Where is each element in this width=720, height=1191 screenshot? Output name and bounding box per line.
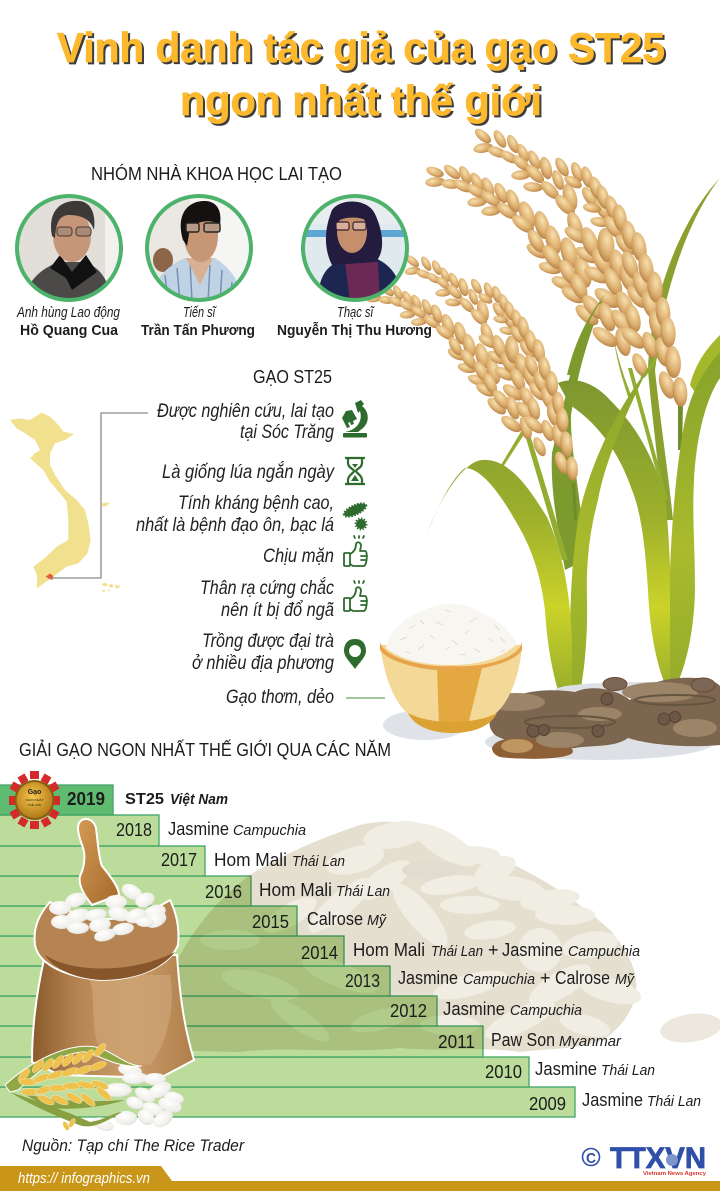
feature: disease resistance	[136, 493, 334, 536]
portrait: Nguyễn Thị Thu Hương	[303, 196, 413, 302]
leaf: upper right back	[648, 178, 720, 520]
caption: Trần Tấn Phương	[141, 304, 255, 339]
row 2013: Jasmine	[398, 968, 458, 988]
rice mound	[386, 604, 517, 665]
row 2017	[161, 850, 345, 870]
medal: Gạo	[28, 789, 41, 796]
feature: sturdy stem: nên ít bị đổ ngã	[221, 600, 334, 621]
feature: short growth: Là giống lúa ngắn ngày	[162, 462, 335, 483]
row 2009: Thái Lan	[647, 1093, 701, 1110]
feature: research: Được nghiên cứu, lai tạo	[157, 401, 334, 422]
map: Vietnam	[10, 413, 120, 592]
row 2016: Thái Lan	[336, 883, 390, 900]
medal	[9, 771, 60, 829]
bar chart: yearly award steps	[0, 785, 575, 1117]
row 2012	[390, 999, 582, 1021]
row 2014: Thái Lan	[431, 943, 483, 960]
row 2013: 2013	[345, 971, 380, 991]
feature: fragrant: Gạo thơm, dẻo	[226, 687, 334, 708]
row 2009	[529, 1090, 701, 1114]
row 2012: Jasmine	[443, 999, 505, 1019]
soil shadow	[485, 724, 715, 760]
row 2014	[301, 940, 640, 963]
icon: hourglass	[345, 458, 365, 484]
row 2016: Hom Mali	[259, 880, 332, 900]
rice in sack	[49, 880, 169, 944]
row 2012: Campuchia	[510, 1002, 582, 1019]
row 2010: Jasmine	[535, 1059, 597, 1079]
feature: research: tại Sóc Trăng	[240, 422, 334, 443]
title	[57, 24, 665, 124]
row 2014: Campuchia	[568, 943, 640, 960]
row 2017: 2017	[161, 850, 197, 870]
feature: disease resistance: nhất là bệnh đạo ôn, bạc lá	[136, 515, 334, 536]
logo: TTXVN: C	[586, 1150, 596, 1167]
portrait: Trần Tấn Phương	[145, 195, 251, 305]
row 2015: Calrose	[307, 909, 363, 929]
row 2010: 2010	[485, 1062, 522, 1082]
panicle: upper plant	[425, 126, 689, 408]
caption: Hồ Quang Cua	[16, 304, 121, 339]
row 2011: Myanmar	[559, 1033, 622, 1050]
row 2015	[252, 909, 387, 932]
row 2017: Hom Mali	[214, 850, 287, 870]
feature: disease resistance: Tính kháng bệnh cao,	[178, 493, 334, 514]
row 2014: Hom Mali	[353, 940, 425, 960]
row 2018: Campuchia	[233, 822, 306, 839]
pointer line to bowl	[346, 697, 385, 699]
footer bar: https:// infographics.vn	[18, 1170, 150, 1187]
row 2013: Calrose	[555, 968, 610, 988]
stem below panicles	[572, 405, 683, 520]
heading: ST25: GẠO ST25	[253, 367, 332, 387]
connector line from map to text	[50, 413, 148, 578]
icon: thumbs up	[344, 581, 367, 611]
feature: sturdy stem	[200, 578, 334, 621]
row 2019: ST25	[125, 791, 164, 808]
icon: bacteria	[342, 501, 368, 529]
heading: awards: GIẢI GẠO NGON NHẤT THẾ GIỚI QUA CÁC NĂM	[19, 739, 391, 760]
feature: widely grown: Trồng được đại trà	[202, 631, 334, 652]
bowl	[380, 645, 522, 727]
golden grains	[16, 1042, 113, 1132]
row 2013: +	[540, 968, 551, 988]
panicle: lower plant	[365, 253, 579, 481]
row 2019: Việt Nam	[170, 791, 228, 808]
leaf: upright left	[570, 370, 647, 724]
medal: THẾ GIỚI	[28, 802, 41, 807]
illustration: rice plants	[365, 126, 720, 724]
row 2018: 2018	[116, 820, 152, 840]
icon: microscope	[342, 400, 368, 438]
scoop	[78, 819, 119, 905]
icon: location pin	[344, 639, 366, 669]
feature: sturdy stem: Thân rạ cứng chắc	[200, 578, 334, 599]
portrait: Hồ Quang Cua	[17, 195, 125, 305]
row 2012: 2012	[390, 1001, 427, 1021]
feature: research	[157, 401, 334, 443]
row 2010	[485, 1059, 655, 1082]
caption: Nguyễn Thị Thu Hương	[277, 304, 432, 339]
row 2016: 2016	[205, 882, 242, 902]
rice ear stalks	[5, 1046, 142, 1092]
row 2009: Jasmine	[582, 1090, 643, 1110]
illustration: soil and bowl of rice	[380, 604, 720, 760]
row 2011: 2011	[438, 1032, 475, 1052]
footer bar	[0, 1166, 720, 1191]
leaf: tall right	[670, 352, 720, 697]
soil mounds	[490, 678, 720, 748]
sack rim	[35, 900, 178, 980]
feature: salt tolerance: Chịu mặn	[263, 546, 334, 567]
row 2013: Mỹ	[615, 971, 635, 988]
row 2019	[67, 789, 228, 809]
caption: Hồ Quang Cua: Anh hùng Lao động	[16, 304, 121, 321]
leaf: big arching right	[558, 380, 672, 697]
white grains	[91, 1062, 185, 1133]
row 2014: 2014	[301, 943, 338, 963]
caption: Nguyễn Thị Thu Hương: Thạc sĩ	[337, 304, 375, 321]
row 2016	[205, 880, 390, 902]
row 2015: 2015	[252, 912, 289, 932]
feature list	[136, 400, 385, 708]
row 2018	[116, 819, 306, 840]
row 2017: Thái Lan	[292, 853, 345, 870]
caption: Nguyễn Thị Thu Hương: Nguyễn Thị Thu Hương	[277, 322, 432, 339]
leaf: tip over grains	[567, 292, 607, 375]
caption: Hồ Quang Cua: Hồ Quang Cua	[20, 322, 119, 339]
heading: team: NHÓM NHÀ KHOA HỌC LAI TẠO	[91, 163, 342, 184]
caption: Trần Tấn Phương: Tiến sĩ	[183, 304, 217, 321]
leaf: narrow left back	[552, 292, 607, 570]
sack body	[32, 955, 194, 1078]
logo: TTXVN: Vietnam News Agency	[643, 1171, 707, 1177]
caption: Trần Tấn Phương: Trần Tấn Phương	[141, 322, 255, 339]
row 2009: 2009	[529, 1094, 566, 1114]
medal: NGON NHẤT	[26, 797, 44, 802]
row 2013	[345, 968, 635, 991]
source: Nguồn: Tạp chí The Rice Trader	[22, 1136, 245, 1155]
illustration: rice sack with scoop	[5, 819, 194, 1133]
row 2014: Jasmine	[502, 940, 563, 960]
icon: thumbs up	[344, 536, 367, 566]
row 2014: +	[488, 940, 499, 960]
leaf: arching left	[427, 460, 572, 724]
award rows	[67, 789, 701, 1114]
feature: widely grown	[192, 631, 334, 674]
row 2010: Thái Lan	[601, 1062, 655, 1079]
background: rice grain pile	[150, 816, 720, 1052]
row 2015: Mỹ	[367, 912, 387, 929]
logo: TTXVN: TTXVN	[610, 1142, 706, 1175]
leaf: right entering	[690, 335, 720, 400]
title: ngon nhất thế giới	[180, 77, 542, 124]
row 2018: Jasmine	[168, 819, 229, 839]
title: Vinh danh tác giả của gạo ST25	[57, 24, 665, 71]
feature: widely grown: ở nhiều địa phương	[192, 653, 334, 674]
row 2019: 2019	[67, 789, 105, 809]
row 2011	[438, 1030, 622, 1052]
row 2011: Paw Son	[491, 1030, 555, 1050]
row 2013: Campuchia	[463, 971, 535, 988]
